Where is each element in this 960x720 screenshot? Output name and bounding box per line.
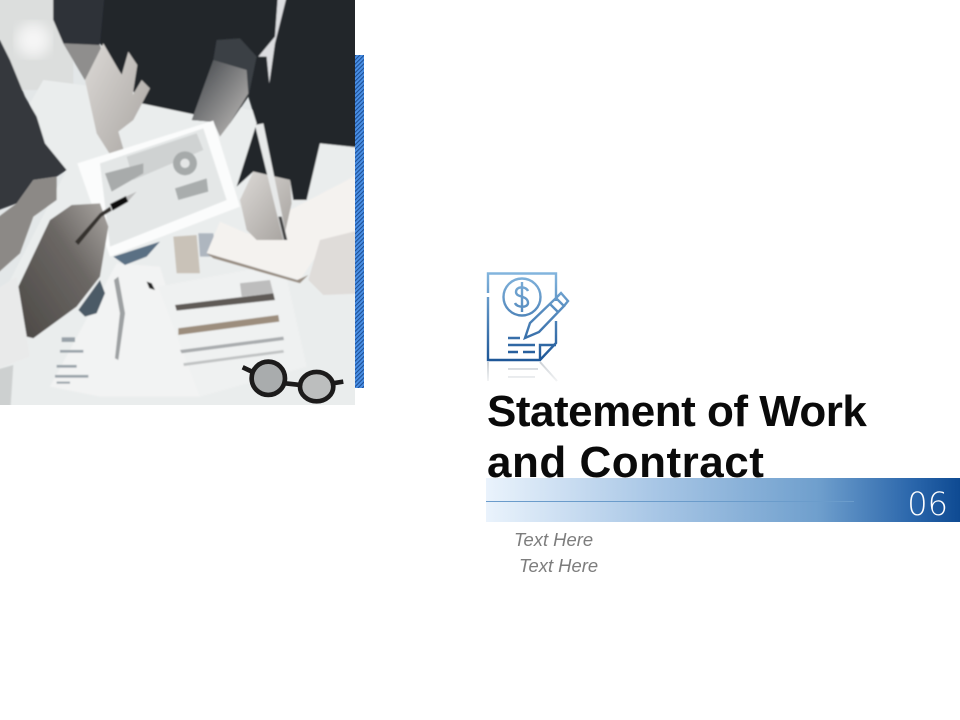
divider line [486, 501, 854, 502]
left sleeve [0, 40, 67, 213]
text placeholder 1: Text Here [514, 529, 593, 550]
front hand [18, 203, 108, 338]
dark shirt [53, 0, 367, 200]
hatched blue strip [355, 55, 364, 388]
writer forearm [192, 60, 248, 137]
glasses [243, 362, 343, 401]
icon: contract with dollar sign and pen [486, 272, 570, 382]
shirt cuff [0, 277, 30, 372]
section number: 06 [907, 485, 948, 523]
shirt placket [258, 0, 288, 83]
writing hand [240, 172, 292, 240]
notebook [207, 170, 367, 280]
table [0, 80, 367, 417]
title: Statement of Work [487, 387, 866, 436]
text placeholder 2: Text Here [519, 555, 598, 576]
title [487, 387, 867, 487]
title: and Contract [487, 438, 764, 487]
pointing hand [85, 43, 150, 170]
tablet [77, 121, 240, 257]
section band with number [486, 478, 960, 522]
documents [50, 263, 200, 397]
right hand [308, 228, 367, 295]
mottled wall [0, 0, 73, 90]
pen [75, 207, 112, 245]
photo: business team reviewing documents [0, 0, 355, 405]
dark sleeve [213, 38, 257, 97]
pointing forearm [53, 0, 105, 80]
left back hand [0, 177, 57, 280]
